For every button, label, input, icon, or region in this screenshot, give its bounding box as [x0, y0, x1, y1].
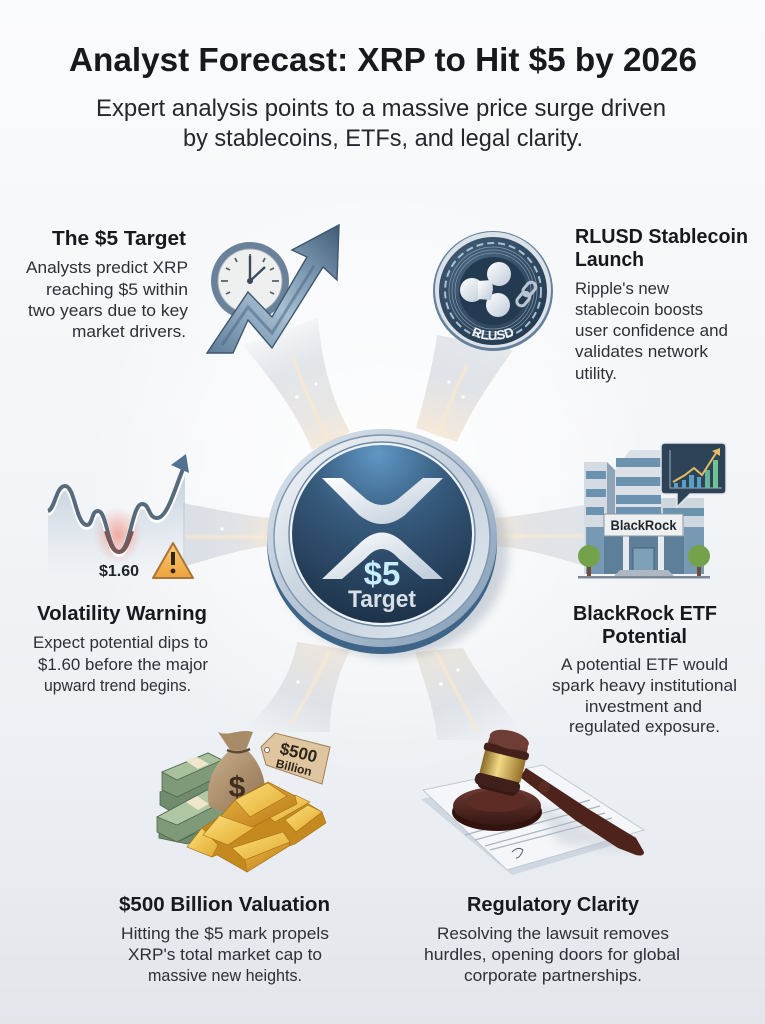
- icon: gavel on legal documents: [421, 725, 644, 875]
- subtitle: Expert analysis points to a massive price surge driven: [96, 95, 666, 122]
- panel: $500 Billion Valuation: massive new heights.: [148, 967, 302, 985]
- icon: BlackRock building with chart bubble: [578, 443, 726, 578]
- panel: The $5 Target: reaching $5 within: [46, 281, 188, 299]
- price tag: Billion: [274, 756, 313, 779]
- chain link: [515, 280, 538, 308]
- panel: RLUSD Stablecoin Launch: user confidence and: [575, 322, 728, 340]
- panel: RLUSD Stablecoin Launch: utility.: [575, 365, 617, 383]
- panel: The $5 Target: market drivers.: [72, 323, 186, 341]
- money bag: [208, 731, 265, 813]
- panel: Regulatory Clarity: Regulatory Clarity: [467, 894, 640, 916]
- subtitle: by stablecoins, ETFs, and legal clarity.: [183, 125, 583, 152]
- trees: [578, 545, 710, 577]
- panel: Regulatory Clarity: Resolving the lawsuit removes: [437, 925, 669, 943]
- title: Analyst Forecast: XRP to Hit $5 by 2026: [69, 41, 697, 78]
- panel: Regulatory Clarity: hurdles, opening doors for global: [424, 946, 680, 964]
- panel: Volatility Warning: [33, 603, 209, 695]
- BlackRock sign: [604, 514, 683, 536]
- subtitle: [96, 95, 666, 152]
- panel: $500 Billion Valuation: $500 Billion Valuation: [119, 894, 330, 916]
- panel: Volatility Warning: Expect potential dips to: [33, 634, 208, 652]
- RLUSD lettering: RLUSD: [472, 327, 514, 340]
- panel: Volatility Warning: Volatility Warning: [37, 603, 207, 625]
- panel: Volatility Warning: upward trend begins.: [44, 677, 191, 695]
- panel: RLUSD Stablecoin Launch: Ripple's new: [575, 280, 669, 298]
- panel: Regulatory Clarity: [424, 894, 680, 985]
- panel: Regulatory Clarity: corporate partnerships.: [464, 967, 642, 985]
- panel: RLUSD Stablecoin Launch: validates network: [575, 343, 709, 361]
- price tag: [261, 733, 330, 784]
- warning triangle: [153, 543, 193, 578]
- panel: BlackRock ETF Potential: Potential: [602, 626, 687, 648]
- gavel head: [473, 725, 534, 798]
- money bag: $: [229, 771, 246, 804]
- gavel handle: [520, 768, 644, 856]
- panel: $500 Billion Valuation: [119, 894, 330, 985]
- cash stacks: [157, 753, 228, 844]
- ripple mark: [460, 262, 511, 317]
- $5 label: $5: [364, 555, 400, 592]
- panel: $500 Billion Valuation: Hitting the $5 mark propels: [121, 925, 329, 943]
- central coin: XRP $5 Target: [267, 429, 508, 658]
- XRP logo mark: [322, 478, 443, 579]
- $1.60 label: $1.60: [99, 563, 139, 580]
- Target label: Target: [348, 586, 416, 613]
- price tag: $500: [278, 739, 319, 767]
- panel: The $5 Target: two years due to key: [28, 302, 189, 320]
- panel: RLUSD Stablecoin Launch: stablecoin boosts: [575, 301, 703, 319]
- gold bars: [187, 782, 326, 872]
- icon: money bag, cash, gold bars and $500 Billion tag: [157, 731, 330, 872]
- panel: The $5 Target: [26, 228, 189, 341]
- panel: BlackRock ETF Potential: investment and: [585, 698, 702, 716]
- panel: BlackRock ETF Potential: A potential ETF would: [561, 656, 728, 674]
- panel: RLUSD Stablecoin Launch: Launch: [575, 249, 644, 271]
- BlackRock sign: BlackRock: [610, 518, 677, 533]
- panel: RLUSD Stablecoin Launch: RLUSD Stablecoin: [575, 226, 748, 248]
- panel: RLUSD Stablecoin Launch: [575, 226, 748, 383]
- panel: BlackRock ETF Potential: BlackRock ETF: [573, 603, 717, 625]
- panel: BlackRock ETF Potential: [552, 603, 737, 736]
- panel: BlackRock ETF Potential: regulated exposure.: [569, 718, 720, 736]
- panel: The $5 Target: The $5 Target: [52, 228, 186, 250]
- panel: BlackRock ETF Potential: spark heavy institutional: [552, 677, 737, 695]
- panel: The $5 Target: Analysts predict XRP: [26, 259, 188, 277]
- chart speech bubble: [661, 443, 726, 507]
- panel: Volatility Warning: $1.60 before the major: [38, 656, 209, 674]
- connector rays from the central coin: [183, 318, 585, 740]
- panel: $500 Billion Valuation: XRP's total market cap to: [128, 946, 322, 964]
- icon: clock with rising arrow: [207, 225, 339, 353]
- icon: RLUSD coin: [433, 231, 553, 351]
- icon: volatility chart with warning: [48, 454, 193, 580]
